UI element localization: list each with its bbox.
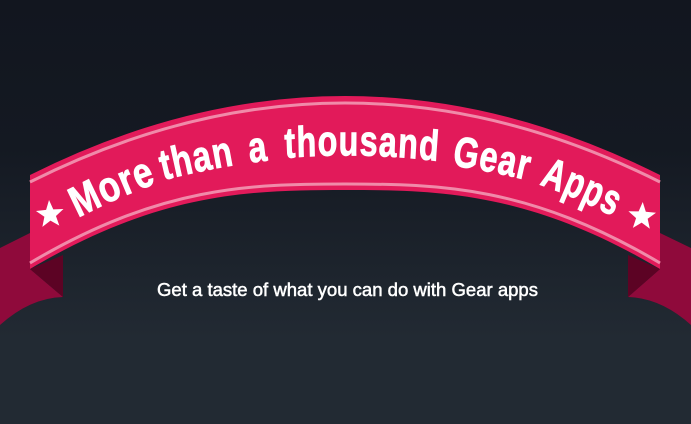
title: More [66, 164, 154, 218]
icon: left star [35, 199, 65, 227]
left ribbon fold [30, 255, 63, 297]
ribbon banner [0, 96, 691, 325]
subtitle: Get a taste of what you can do with Gear apps [157, 280, 538, 300]
title: thousand [284, 125, 438, 162]
left ribbon tail [0, 233, 63, 325]
right ribbon fold [628, 255, 660, 297]
icon: right star [628, 201, 657, 229]
ribbon body [30, 96, 660, 269]
title: Apps [539, 159, 620, 214]
right ribbon tail [628, 233, 691, 325]
title: than [158, 143, 233, 180]
top ribbon stripe [30, 103, 660, 182]
title [66, 125, 620, 218]
title: a [249, 138, 268, 163]
title: Gear [454, 137, 532, 180]
bottom ribbon stripe [30, 184, 660, 263]
